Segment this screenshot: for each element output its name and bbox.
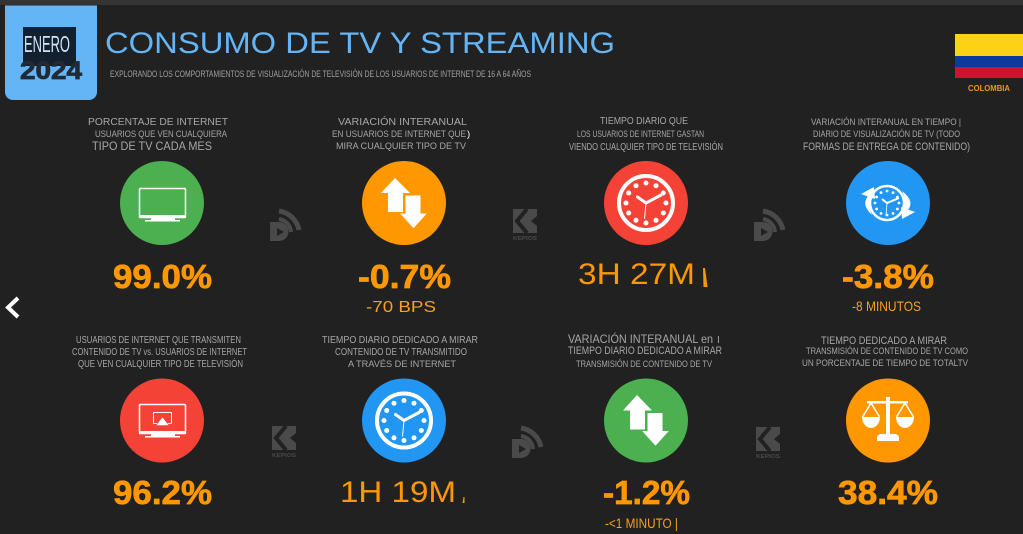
icon: clock with rotating arrows: [846, 161, 930, 245]
watermark: Kepios: KEPIOS: [272, 453, 296, 459]
heading: [332, 115, 470, 152]
flag: Colombia: [955, 34, 1023, 93]
value: 3H 27M: [578, 258, 695, 291]
panel: streaming share of total TV time: [802, 335, 968, 511]
change note: -8 MINUTOS: [852, 298, 921, 314]
heading: CONTENIDO DE TV TRANSMITIDO: [335, 346, 467, 358]
heading: TIPO DE TV CADA MES: [92, 141, 212, 153]
value: -0.7%: [358, 258, 451, 295]
heading: VARIACIÓN INTERANUAL EN TIEMPO |: [811, 117, 961, 128]
panel: annual change in streaming time: [568, 331, 722, 531]
panel: daily streaming time: [322, 334, 478, 509]
heading: I: [717, 335, 720, 346]
heading: [88, 117, 228, 153]
heading: DIARIO DE VISUALIZACIÓN DE TV (TODO: [813, 129, 960, 140]
date badge: [5, 6, 97, 100]
heading: LOS USUARIOS DE INTERNET GASTAN: [577, 129, 704, 140]
panel: annual change in daily TV time: [803, 117, 970, 314]
value: 1H 19M: [340, 476, 456, 509]
arrow: previous: [8, 298, 18, 317]
heading: PORCENTAJE DE INTERNET: [88, 117, 228, 128]
heading: FORMAS DE ENTREGA DE CONTENIDO): [803, 141, 970, 153]
heading: VARIACIÓN INTERANUAL en: [568, 331, 713, 346]
heading: [322, 334, 478, 370]
heading: MIRA CUALQUIER TIPO DE TV: [336, 141, 467, 152]
heading: A TRAVÉS DE INTERNET: [348, 359, 456, 370]
heading: CONTENIDO DE TV vs. USUARIOS DE INTERNET: [72, 347, 247, 358]
watermark: DataReportal: [754, 211, 783, 241]
date badge: ENERO: [24, 31, 70, 57]
watermark: Kepios: [272, 426, 296, 459]
value: 96.2%: [113, 474, 212, 511]
title: CONSUMO DE TV Y STREAMING: [105, 27, 615, 60]
icon: television: [120, 161, 204, 245]
heading: EN USUARIOS DE INTERNET QUE: [332, 129, 466, 140]
watermark: DataReportal: [512, 428, 541, 458]
heading: VARIACIÓN INTERANUAL: [338, 115, 467, 128]
icon: up and down arrows: [362, 161, 446, 245]
heading: TIEMPO DIARIO DEDICADO A MIRAR: [568, 345, 722, 357]
heading: ): [467, 129, 470, 140]
panel: monthly TV viewers: [88, 117, 228, 295]
watermark: Kepios: [513, 209, 537, 242]
value: 99.0%: [113, 258, 212, 295]
change note: -<1 MINUTO |: [605, 515, 678, 531]
clipped letter fragment: [703, 268, 708, 287]
heading: [72, 335, 247, 370]
icon: clock: [362, 378, 446, 462]
heading: TIEMPO DIARIO DEDICADO A MIRAR: [322, 334, 478, 346]
heading: [568, 331, 722, 370]
date badge: 2024: [20, 57, 82, 85]
heading: [803, 117, 970, 153]
heading: [569, 116, 723, 153]
icon: clock: [604, 161, 688, 245]
heading: [802, 335, 968, 368]
watermark: DataReportal: [270, 211, 299, 241]
flag: Colombia: COLOMBIA: [968, 84, 1010, 93]
heading: TRANSMISIÓN DE CONTENIDO DE TV: [576, 359, 713, 370]
panel: daily TV time: [569, 116, 723, 291]
heading: TIEMPO DEDICADO A MIRAR: [821, 335, 947, 347]
change note: -70 BPS: [366, 299, 436, 316]
watermark: Kepios: KEPIOS: [756, 454, 780, 460]
heading: TIEMPO DIARIO QUE: [600, 116, 688, 127]
clipped letter fragment: [462, 497, 464, 503]
icon: balance scale: [846, 378, 930, 462]
heading: VIENDO CUALQUIER TIPO DE TELEVISIÓN: [569, 140, 723, 153]
heading: TRANSMISIÓN DE CONTENIDO DE TV COMO: [806, 346, 968, 356]
heading: USUARIOS QUE VEN CUALQUIERA: [95, 129, 228, 140]
value: 38.4%: [838, 474, 938, 511]
subtitle: EXPLORANDO LOS COMPORTAMIENTOS DE VISUALIZACIÓN DE TELEVISIÓN DE LOS USUARIOS DE INTERNET DE 16 A 64 AÑOS: [110, 69, 531, 79]
panel: annual change in TV viewers: [332, 115, 470, 316]
icon: streaming television: [120, 378, 204, 462]
value: -1.2%: [603, 474, 690, 511]
value: -3.8%: [842, 258, 934, 295]
watermark: Kepios: [756, 427, 780, 460]
watermark: Kepios: KEPIOS: [513, 236, 537, 242]
panel: streaming viewers share: [72, 335, 247, 511]
heading: USUARIOS DE INTERNET QUE TRANSMITEN: [76, 335, 241, 346]
icon: up and down arrows: [604, 378, 688, 462]
heading: UN PORCENTAJE DE TIEMPO DE TOTALTV: [802, 358, 968, 368]
heading: QUE VEN CUALQUIER TIPO DE TELEVISIÓN: [78, 357, 243, 370]
